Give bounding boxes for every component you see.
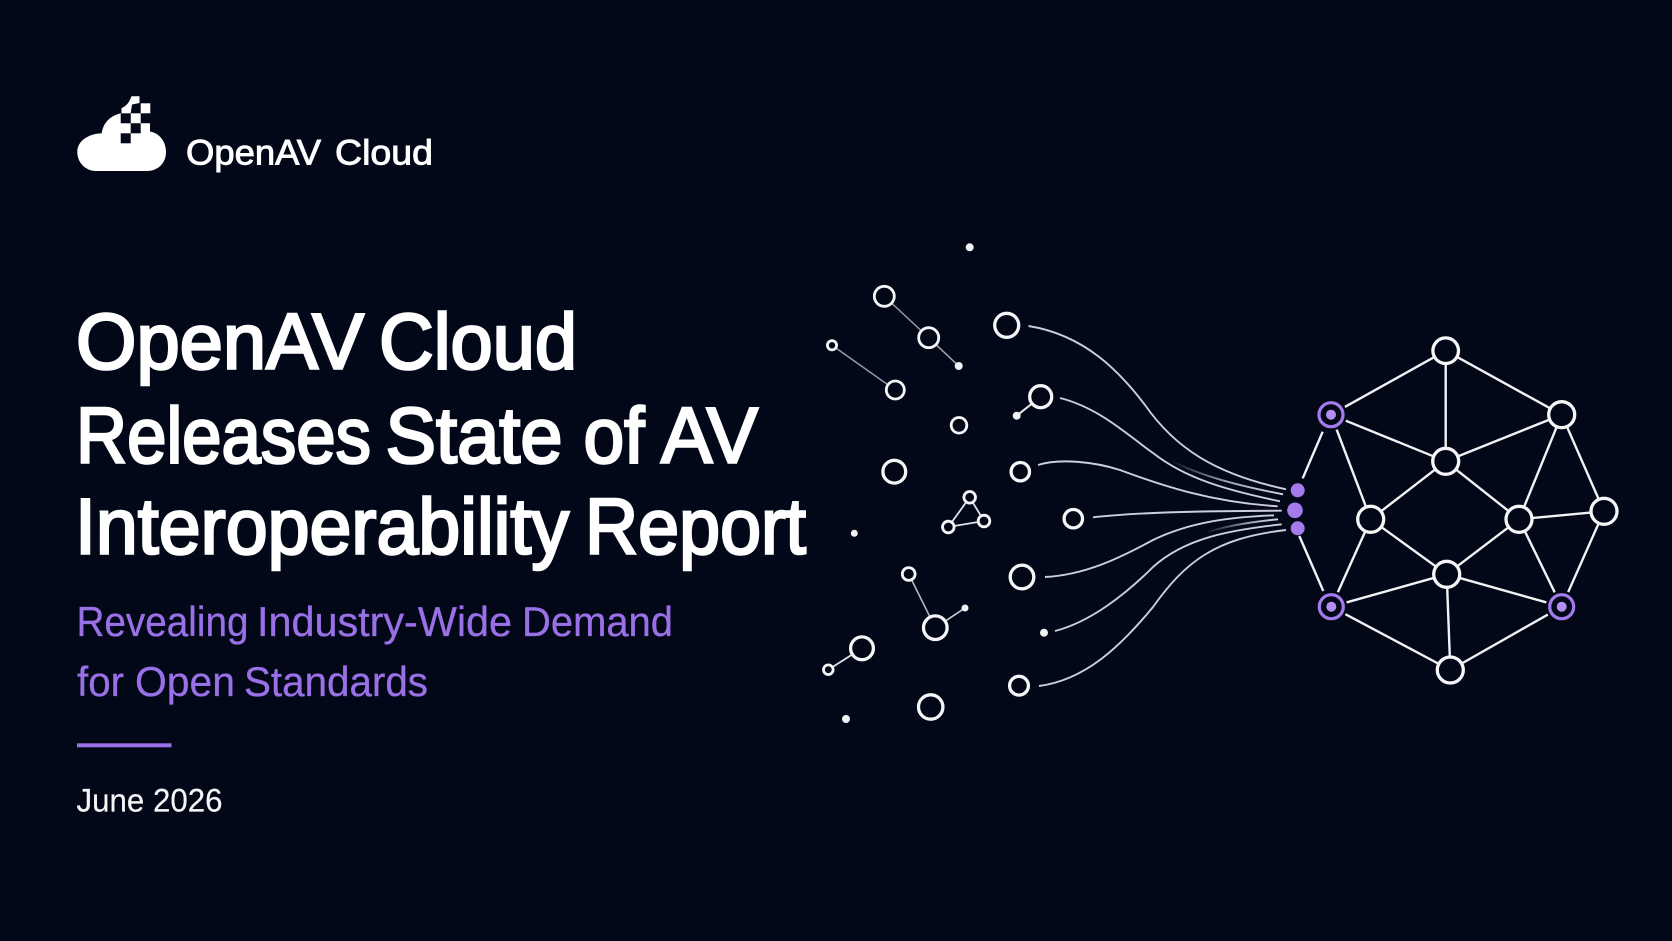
title: State [386,391,562,480]
subtitle: Industry-Wide [257,598,512,645]
icon: pixelated cloud [77,96,166,171]
subtitle: Revealing [76,598,248,645]
title: OpenAV [76,296,364,385]
converging connection curves [1028,326,1286,686]
scattered nodes [824,243,1083,723]
title: Cloud [379,296,577,385]
purple hub nodes [1315,399,1578,623]
accent rule [77,743,172,747]
date: June 2026 [76,782,222,818]
logo wordmark: Cloud [335,132,433,172]
logo wordmark [186,132,433,172]
subtitle: Demand [522,598,673,645]
logo: OpenAV Cloud [77,96,433,172]
title [75,296,806,570]
title: Interoperability [75,481,569,570]
title: AV [661,391,758,480]
convergence purple dots [1287,483,1305,535]
title: Releases [76,391,371,480]
title: Report [585,481,806,570]
title: of [584,391,645,480]
mesh network [1299,338,1617,683]
subtitle: Standards [244,658,428,705]
logo wordmark: OpenAV [186,132,321,172]
subtitle [76,598,673,705]
subtitle: for [77,658,124,705]
subtitle: Open [135,658,235,705]
